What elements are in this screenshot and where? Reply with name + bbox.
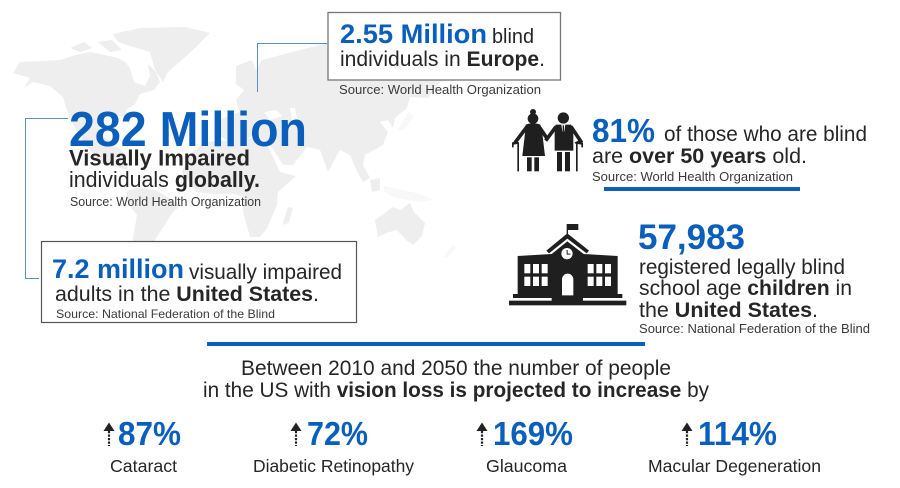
stat: 57,983 school age children: the United States. bbox=[639, 299, 818, 322]
callout: United States adults: adults in the United States. bbox=[55, 283, 319, 306]
connector: global to Europe bbox=[258, 44, 327, 92]
stat: 81 percent over 50 bbox=[592, 112, 867, 184]
callout: Europe bbox=[328, 12, 560, 80]
icon: up arrow bbox=[104, 422, 114, 446]
stat: diabetic retinopathy: 72% bbox=[307, 415, 368, 452]
stat: glaucoma: Glaucoma bbox=[486, 456, 567, 476]
stat: glaucoma: 169% bbox=[493, 415, 573, 452]
callout: United States adults: Source: National Federation of the Blind bbox=[56, 307, 275, 321]
callout: United States adults: 7.2 million bbox=[52, 254, 184, 284]
callout: Europe: blind bbox=[492, 25, 534, 48]
stat: glaucoma bbox=[476, 415, 573, 476]
stat: macular degeneration: Macular Degeneration bbox=[648, 456, 821, 476]
stat: 81 percent over 50: are over 50 years old. bbox=[592, 145, 807, 168]
stat: 57,983 school age children: Source: National Federation of the Blind bbox=[639, 322, 870, 336]
icon: elderly couple bbox=[512, 109, 583, 171]
stat: 57,983 school age children: school age children in bbox=[639, 277, 852, 300]
icon: up arrow bbox=[682, 422, 692, 446]
connector: global to United States bbox=[26, 118, 68, 278]
stat: diabetic retinopathy: Diabetic Retinopathy bbox=[253, 456, 414, 476]
stat: 282 million globally: individuals globally. bbox=[69, 167, 260, 192]
stat: macular degeneration bbox=[648, 415, 821, 476]
callout: United States adults: visually impaired bbox=[189, 261, 342, 284]
icon: up arrow bbox=[476, 422, 488, 446]
heading: projection: in the US with vision loss is projected to increase by bbox=[203, 379, 709, 402]
heading: projection: Between 2010 and 2050 the number of people bbox=[241, 357, 671, 380]
icon: up arrow bbox=[290, 422, 302, 446]
callout: United States adults bbox=[42, 242, 356, 322]
stat: 81 percent over 50: Source: World Health Organization bbox=[592, 169, 793, 184]
icon: school building bbox=[509, 224, 626, 305]
stat: 57,983 school age children: 57,983 bbox=[638, 218, 745, 257]
stat: 81 percent over 50: 81% bbox=[592, 112, 655, 149]
stat: 282 million globally: 282 Million bbox=[69, 103, 307, 157]
heading: projection bbox=[203, 357, 709, 402]
stat: cataract: Cataract bbox=[110, 456, 177, 476]
stat: 57,983 school age children bbox=[638, 218, 870, 336]
world map background bbox=[13, 27, 470, 290]
stat: cataract: 87% bbox=[118, 415, 181, 452]
stat: macular degeneration: 114% bbox=[698, 415, 777, 452]
source: Europe: Source: World Health Organization bbox=[339, 82, 541, 97]
divider: above projection bbox=[207, 342, 645, 346]
stat: 282 million globally: Source: World Health Organization bbox=[70, 195, 261, 209]
stat: 57,983 school age children: registered legally blind bbox=[639, 256, 845, 279]
callout: Europe: individuals in Europe. bbox=[340, 48, 545, 71]
stat: 81 percent over 50: of those who are blind bbox=[664, 123, 867, 146]
stat: cataract bbox=[104, 415, 181, 476]
stat: 282 million globally: Visually Impaired bbox=[69, 146, 250, 170]
stat: 282 million globally bbox=[69, 103, 307, 209]
stat: diabetic retinopathy bbox=[253, 415, 414, 476]
callout: Europe: 2.55 Million bbox=[340, 19, 487, 49]
divider: under 81 percent bbox=[604, 187, 800, 191]
